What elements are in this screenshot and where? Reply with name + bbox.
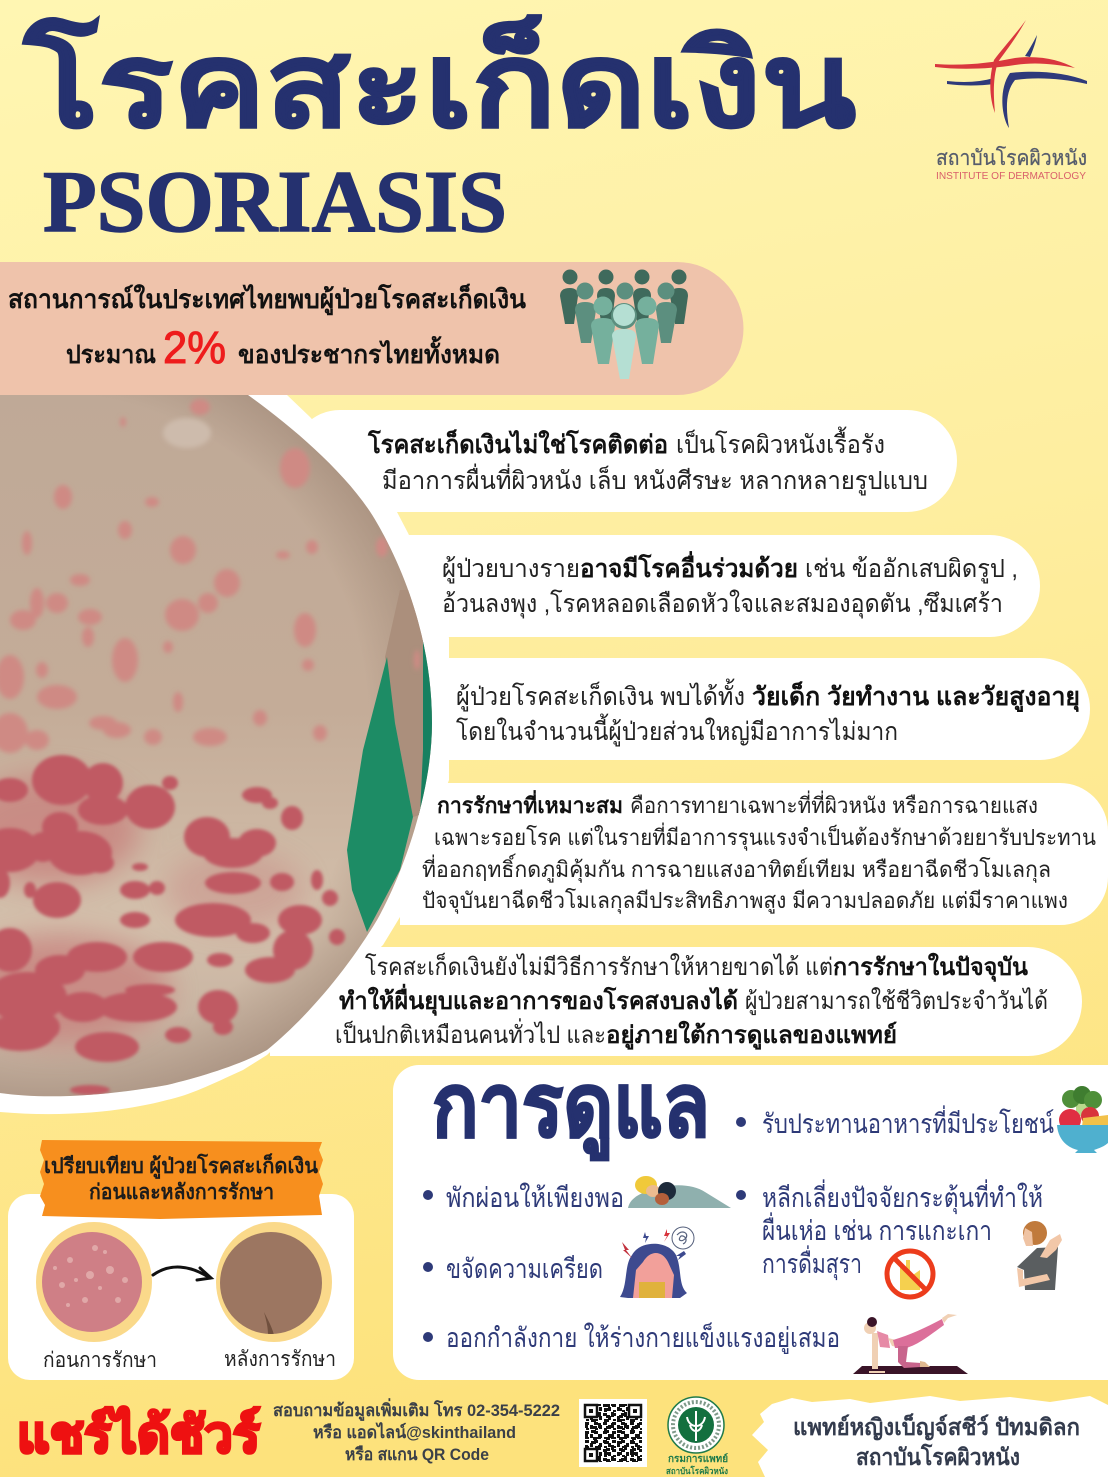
text pill 2: อ้วนลงพุง ,โรคหลอดเลือดหัวใจและสมองอุดตัน ,ซึมเศร้า: [442, 589, 1003, 619]
care heading: การดูแล: [432, 1056, 710, 1161]
text pill 2: เช่น ข้ออักเสบผิดรูป ,: [805, 555, 1018, 584]
author name: แพทย์หญิงเบ็ญจ์สชีว์ ปัทมดิลก: [793, 1412, 1080, 1441]
contact info: [273, 1398, 560, 1464]
text pill 4: treatment: คือการทายาเฉพาะที่ที่ผิวหนัง หรือการฉายแสง: [630, 790, 1038, 818]
care: avoid triggers: ผื่นเห่อ เช่น การแกะเกา: [762, 1212, 992, 1246]
seal caption: กรมการแพทย์: [668, 1453, 728, 1465]
icon: stressed woman: [620, 1227, 694, 1298]
label banner: เปรียบเทียบ ผู้ป่วยโรคสะเก็ดเงิน: [44, 1152, 319, 1180]
logo: institute of dermatology: [935, 20, 1087, 182]
icon: person scratching: [1017, 1221, 1062, 1290]
icon: food bowl: [1057, 1086, 1108, 1153]
text pill 5: เป็นปกติเหมือนคนทั่วไป และ: [335, 1018, 606, 1049]
seal sub caption: สถาบันโรคผิวหนัง: [666, 1465, 728, 1476]
contact info: สอบถามข้อมูลเพิ่มเติม โทร 02-354-5222: [273, 1398, 560, 1422]
text pill 4: treatment: ปัจจุบันยาฉีดชีวโมเลกุลมีประสิทธิภาพสูง มีความปลอดภัย แต่มีราคาแพง: [422, 888, 1068, 914]
icon: yoga pose: [853, 1314, 968, 1374]
photo: psoriasis plaques on back: [0, 390, 440, 1100]
QR code: [579, 1399, 647, 1467]
care: avoid triggers: การดื่มสุรา: [762, 1245, 862, 1281]
text pill 5: โรคสะเก็ดเงินยังไม่มีวิธีการรักษาให้หายขาดได้ แต่: [365, 952, 833, 981]
care: rest: พักผ่อนให้เพียงพอ: [446, 1182, 624, 1213]
text pill 1: มีอาการผื่นที่ผิวหนัง เล็บ หนังศีรษะ หลากหลายรูปแบบ: [382, 463, 928, 496]
white backing behind photo and text pills: [0, 395, 1108, 1114]
text pill 4: treatment: ที่ออกฤทธิ์กดภูมิคุ้มกัน การฉายแสงอาทิตย์เทียม หรือยาฉีดชีวโมเลกุล: [422, 854, 1051, 883]
contact info: หรือ แอดไลน์@skinthailand: [313, 1422, 516, 1442]
text pill 1: [367, 426, 928, 496]
text pill 5: อยู่ภายใต้การดูแลของแพทย์: [606, 1020, 897, 1050]
logo english name: INSTITUTE OF DERMATOLOGY: [936, 171, 1086, 182]
text pill 3: ผู้ป่วยโรคสะเก็ดเงิน พบได้ทั้ง: [456, 678, 745, 712]
text pill 3: [456, 678, 1080, 747]
title: English: PSORIASIS: [43, 154, 507, 251]
care: food: [736, 1086, 1108, 1153]
share slogan: แชร์ได้ชัวร์: [17, 1406, 260, 1463]
text pill 5: [335, 952, 1048, 1050]
text pill 5: การรักษาในปัจจุบัน: [833, 952, 1029, 983]
care: rest: [423, 1176, 731, 1213]
icon: group of people: [560, 270, 688, 379]
care: stress: ขจัดความเครียด: [446, 1254, 603, 1284]
logo: ministry of public health: [666, 1397, 728, 1476]
text pill 3: โดยในจำนวนนี้ผู้ป่วยส่วนใหญ่มีอาการไม่มาก: [456, 713, 898, 747]
title: Thai: โรคสะเก็ดเงิน: [23, 14, 856, 152]
banner line 2: [66, 322, 500, 373]
label: before: ก่อนการรักษา: [43, 1349, 157, 1372]
text pill 2: อาจมีโรคอื่นร่วมด้วย: [580, 551, 798, 583]
banner line 2: 2%: [163, 322, 226, 373]
text pill 1: โรคสะเก็ดเงินไม่ใช่โรคติดต่อ: [367, 429, 668, 459]
icon: sleeping couple: [628, 1176, 731, 1208]
care: avoid triggers: [736, 1179, 1062, 1297]
green drape: [347, 590, 440, 932]
care: stress: [423, 1227, 694, 1298]
photo: before treatment: [36, 1222, 152, 1342]
text pill 5: ผู้ป่วยสามารถใช้ชีวิตประจำวันได้: [745, 987, 1048, 1016]
label banner: ก่อนและหลังการรักษา: [89, 1181, 274, 1204]
author institute: สถาบันโรคผิวหนัง: [856, 1443, 1020, 1470]
banner line 2: ของประชากรไทยทั้งหมด: [238, 335, 500, 369]
arrow: [153, 1267, 211, 1280]
icon: no alcohol: [887, 1251, 933, 1297]
panel: Thailand prevalence banner: [0, 262, 744, 395]
banner line 1: สถานการณ์ในประเทศไทยพบผู้ป่วยโรคสะเก็ดเงิน: [8, 283, 526, 316]
care: exercise: [423, 1314, 968, 1374]
panel: before and after comparison: [8, 1140, 354, 1380]
panel: care: [393, 1056, 1108, 1380]
care: exercise: ออกกำลังกาย ให้ร่างกายแข็งแรงอยู่เสมอ: [446, 1320, 840, 1354]
text pill 2: ผู้ป่วยบางราย: [442, 555, 580, 584]
care: avoid triggers: หลีกเลี่ยงปัจจัยกระตุ้นที่ทำให้: [762, 1179, 1043, 1215]
contact info: หรือ สแกน QR Code: [345, 1444, 489, 1464]
logo name: สถาบันโรคผิวหนัง: [936, 146, 1087, 170]
text pill 5: ทำให้ผื่นยุบและอาการของโรคสงบลงได้: [339, 983, 738, 1017]
label banner: [40, 1140, 323, 1219]
text pill 2: [442, 551, 1018, 619]
text pill 4: treatment: [422, 789, 1096, 914]
photo: after treatment: [216, 1222, 332, 1342]
text pill 3: วัยเด็ก วัยทำงาน และวัยสูงอายุ: [752, 681, 1080, 713]
text pill 4: treatment: การรักษาที่เหมาะสม: [437, 789, 623, 818]
label: after: หลังการรักษา: [224, 1348, 336, 1371]
text pill 1: เป็นโรคผิวหนังเรื้อรัง: [676, 426, 885, 459]
banner line 2: ประมาณ: [66, 341, 156, 369]
author brush panel: [752, 1396, 1108, 1477]
